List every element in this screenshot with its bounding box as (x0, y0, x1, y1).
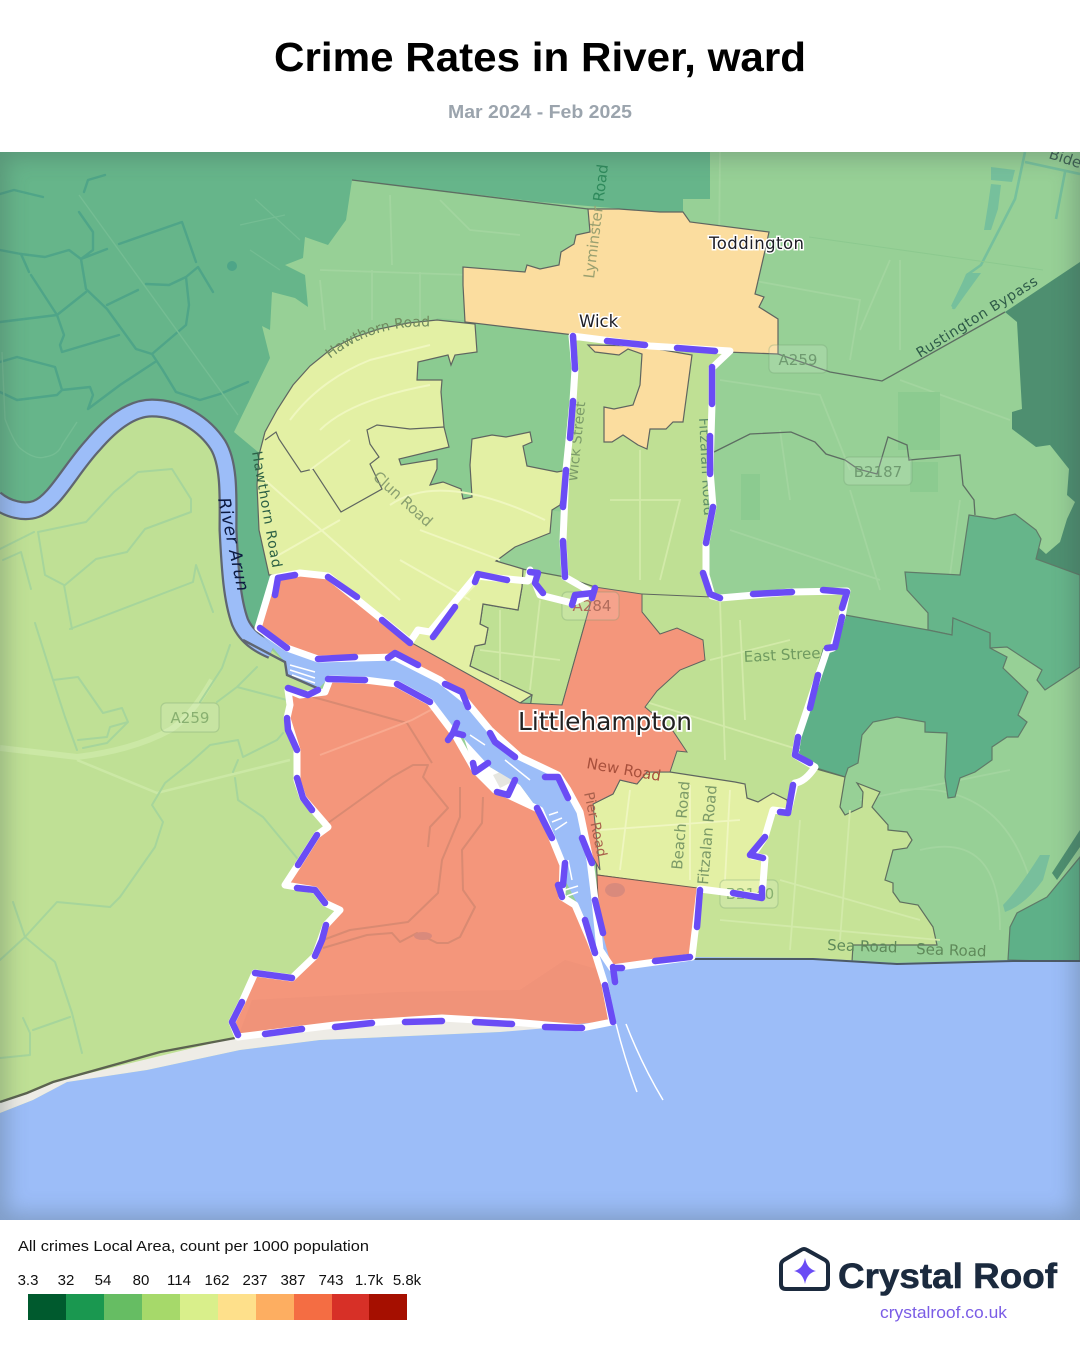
marina land south of channel (463, 735, 537, 808)
label: Littlehampton: Littlehampton (518, 707, 692, 736)
label: road numbers: A259 (171, 709, 209, 727)
legend scale labels: 32 (58, 1272, 74, 1289)
legend title: All crimes Local Area, count per 1000 population (18, 1238, 369, 1255)
map labels (213, 152, 1080, 960)
region: orange small south east of harbour (597, 875, 698, 968)
title: Crime Rates in River, ward (274, 34, 806, 80)
label: Sea Road west: Sea Road (827, 936, 898, 956)
legend scale labels: 114 (167, 1272, 191, 1289)
label: River Arun: River Arun (213, 496, 252, 593)
region: medium green west of Wick Street (380, 318, 575, 512)
label: Lyminster Road: Lyminster Road (580, 163, 612, 279)
label: road numbers: A284 (573, 597, 611, 615)
sea (0, 957, 1080, 1220)
legend scale labels: 5.8k (393, 1272, 422, 1289)
region: orange south of harbour (232, 679, 612, 1037)
region: green block centre right (795, 615, 1028, 798)
label: road numbers (171, 351, 902, 903)
label: Rustington Bypass: Rustington Bypass (914, 274, 1041, 361)
label: road numbers: B2140 (726, 885, 774, 903)
region: yellow-green Hawthorn estate (257, 320, 568, 703)
coastline (0, 1038, 235, 1102)
label: Clun Road: Clun Road (369, 468, 436, 530)
ward boundary: white casing (232, 336, 847, 1037)
subtitle: date range: Mar 2024 - Feb 2025 (448, 102, 632, 122)
label: Wick: Wick (579, 312, 619, 331)
legend scale labels (18, 1272, 422, 1289)
legend scale labels: 3.3 (18, 1272, 38, 1289)
legend (18, 1238, 422, 1320)
pond on east side (1003, 855, 1050, 912)
legend scale labels: 1.7k (355, 1272, 384, 1289)
region: orange town centre (258, 575, 705, 870)
top-right drainage and ponds (809, 152, 1080, 309)
label: Fitzalan Road north: Fitzalan Road (695, 417, 716, 516)
label: New Road: New Road (585, 754, 662, 785)
region: dark green east edge (1005, 262, 1080, 575)
label: Hawthorn Road west: Hawthorn Road (248, 450, 284, 569)
ward boundary: purple dashes (232, 336, 847, 1035)
label: Toddington: Toddington (708, 234, 804, 253)
label: Hawthorn Road north (330, 326, 440, 359)
river: harbour channel (258, 630, 620, 1022)
legend scale labels: 237 (242, 1272, 268, 1289)
region: light green patch west of A284 (470, 569, 595, 708)
river: upper River Arun (0, 408, 272, 650)
region: peach Toddington (463, 209, 778, 354)
map panel (0, 152, 1080, 1220)
road textures in light green blocks (480, 450, 940, 950)
harbour marina details (290, 665, 663, 1100)
region: green block east (905, 514, 1080, 690)
label: road numbers: B2187 (854, 463, 902, 481)
legend scale labels: 80 (133, 1272, 149, 1289)
region: north-west dark green farmland (0, 152, 710, 700)
label: Pier Road: Pier Road (580, 791, 609, 858)
wordmark: Crystal Roof (838, 1257, 1057, 1296)
region: light green south east (692, 768, 937, 962)
logo: Crystal Roof (779, 1247, 1058, 1322)
beach strip (0, 1020, 618, 1113)
legend scale labels: 54 (95, 1272, 111, 1289)
ward boundary lines in the medium green area (352, 180, 1005, 515)
map edge vignette (0, 152, 1080, 1220)
region: peach south of Wick (588, 345, 692, 449)
legend scale labels: 387 (280, 1272, 306, 1289)
label: Beach Road: Beach Road (668, 780, 694, 870)
road badges (161, 345, 912, 908)
label: Sea Road east: Sea Road (916, 940, 987, 960)
region: left meadow south of the river (0, 408, 340, 1105)
legend scale labels: 743 (318, 1272, 344, 1289)
label: road numbers: A259 (779, 351, 817, 369)
region: yellow-green Beach Road area (593, 772, 788, 897)
website link: crystalroof.co.uk (880, 1304, 1008, 1322)
icon: house with star (781, 1249, 828, 1289)
label: Wick Street: Wick Street (565, 400, 589, 482)
legend colour ramp (28, 1294, 407, 1320)
region: green block south east (1008, 857, 1080, 962)
label: Fitzalan Road south: Fitzalan Road (694, 784, 721, 885)
legend scale labels: 162 (204, 1272, 230, 1289)
region: central light green (563, 334, 847, 812)
label: East Street: East Stree (743, 644, 821, 666)
label text: Hawthorn Road north: Hawthorn Road (325, 316, 429, 358)
medium green road texture and land-use patches (320, 152, 1030, 930)
